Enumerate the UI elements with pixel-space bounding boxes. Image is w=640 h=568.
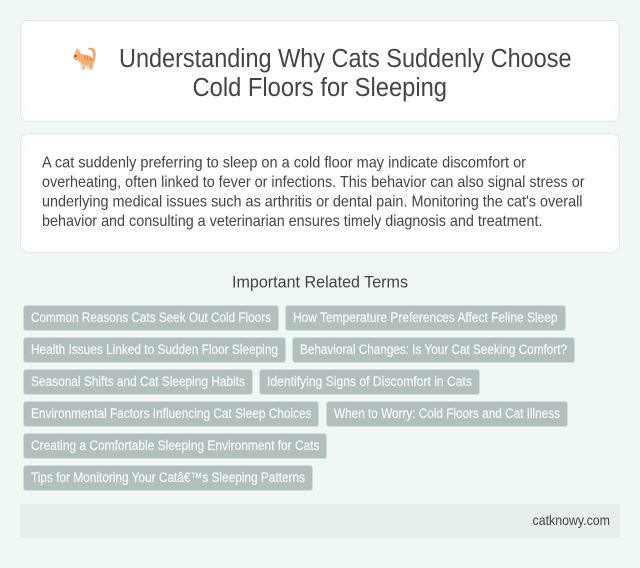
chip [292,338,574,362]
heading: related terms: Important Related Terms [232,274,408,292]
title text: Understanding Why Cats Suddenly Choose [119,45,572,73]
chip: Health Issues Linked to Sudden Floor Sleeping [31,342,278,357]
chip [24,402,318,426]
chip: Common Reasons Cats Seek Out Cold Floors [31,310,271,325]
chip: Creating a Comfortable Sleeping Environment for Cats [31,438,320,453]
chip: When to Worry: Cold Floors and Cat Illness [334,406,560,421]
chip [24,338,286,362]
chip: How Temperature Preferences Affect Feline Sleep [293,310,558,325]
chip: Identifying Signs of Discomfort in Cats [267,374,472,389]
panel: title card [20,20,620,122]
chip [326,402,568,426]
chip: Behavioral Changes: Is Your Cat Seeking Comfort? [300,342,567,357]
panel: term chips [24,306,574,490]
chip: Environmental Factors Influencing Cat Sleep Choices [31,406,312,421]
panel: description: behavior and consulting a veterinarian ensures timely diagnosis and treatment. [42,213,542,230]
chip [24,306,278,330]
panel: description: A cat suddenly preferring to sleep on a cold floor may indicate discomfort or [42,154,527,172]
chip [24,434,326,458]
chip [24,370,252,394]
footer: catknowy.com [532,512,610,528]
chip: Seasonal Shifts and Cat Sleeping Habits [31,374,245,389]
chip: Tips for Monitoring Your Catâ€™s Sleeping Patterns [31,470,305,485]
panel: description [20,134,620,252]
chip [24,466,312,490]
panel: description: underlying medical issues such as arthritis or dental pain. Monitoring the cat's overall [42,194,582,210]
title text [119,45,572,102]
icon: cat [73,48,96,70]
title text: Cold Floors for Sleeping [192,74,447,102]
footer [20,504,620,538]
chip [286,306,566,330]
chip [260,370,480,394]
panel: description: overheating, often linked to fever or infections. This behavior can also signal stress or [42,174,585,191]
